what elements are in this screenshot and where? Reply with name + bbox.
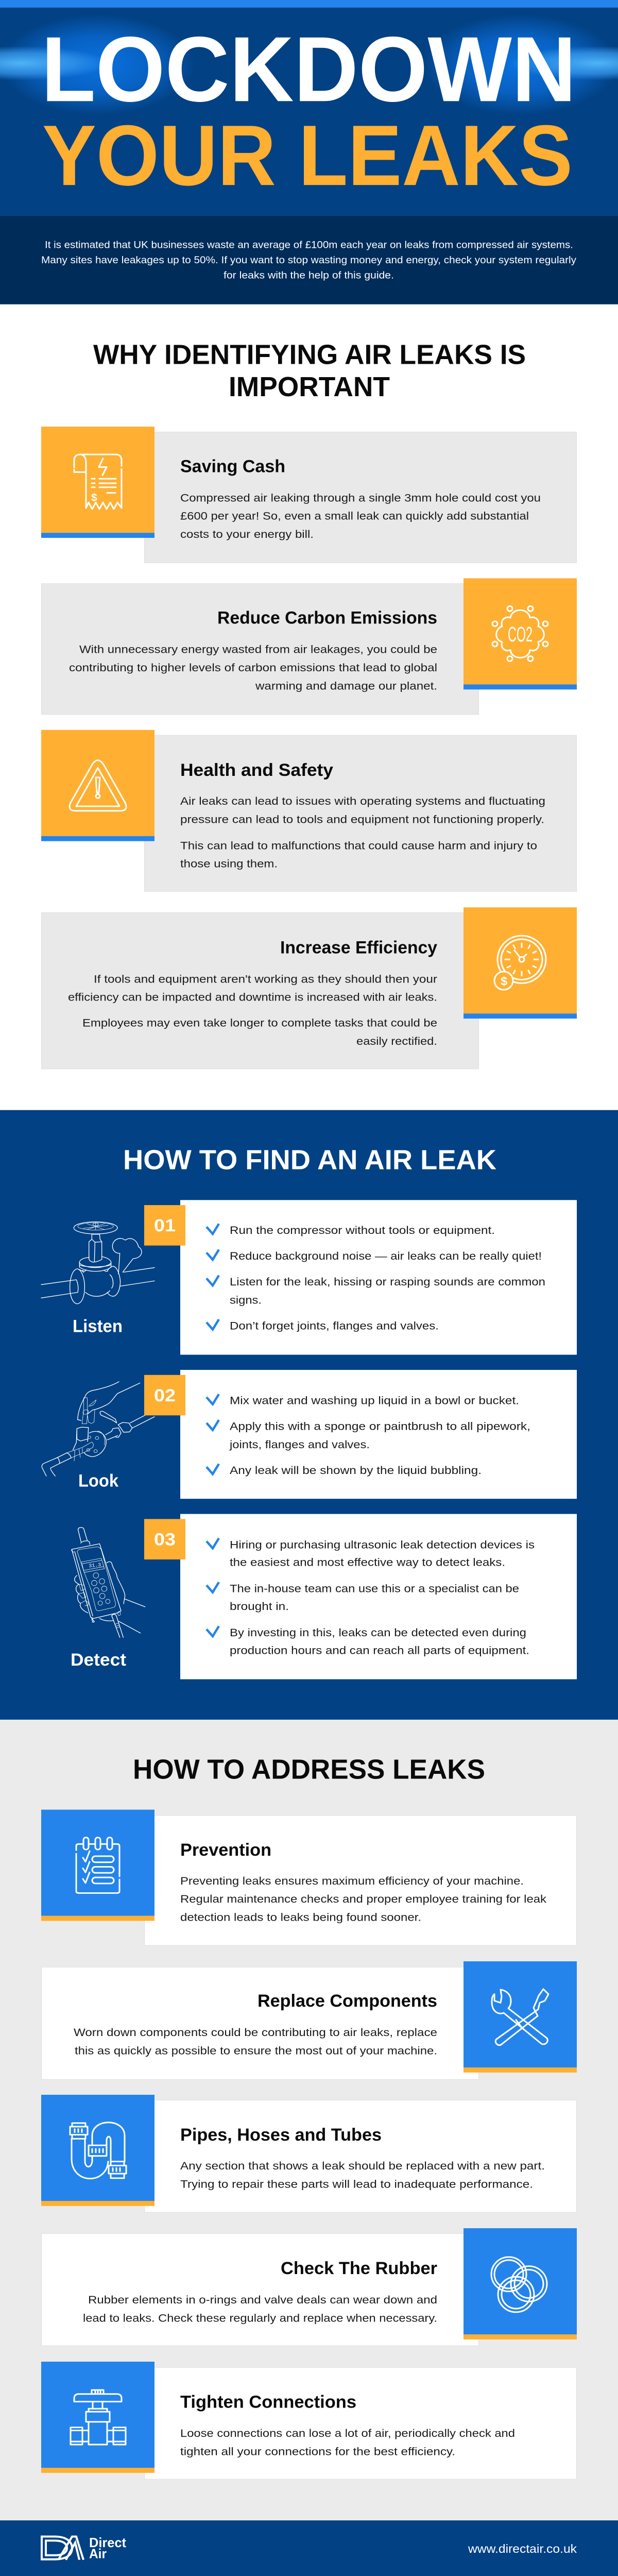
checklist: the easiest and most effective way to detect leaks. xyxy=(230,1556,505,1569)
label: Look xyxy=(78,1471,119,1491)
body text xyxy=(180,1875,546,1923)
step 02: look xyxy=(42,1370,577,1499)
checklist xyxy=(207,1394,530,1477)
checklist: Any leak will be shown by the liquid bubbling. xyxy=(230,1464,482,1477)
section: how to find an air leak xyxy=(0,1110,618,1720)
body text: Trying to repair these parts will lead to inadequate performance. xyxy=(180,2178,533,2190)
intro text block: It is estimated that UK businesses waste an average of £100m each year on leaks from compressed air systems. xyxy=(45,240,573,251)
white card xyxy=(180,1370,577,1499)
number badge 01: 01 xyxy=(154,1216,176,1235)
checklist: joints, flanges and valves. xyxy=(229,1438,370,1451)
body text xyxy=(83,2294,437,2324)
heading: why identifying air leaks is important: IMPORTANT xyxy=(229,371,390,402)
icon: crossed wrench and screwdriver xyxy=(464,1961,577,2073)
icon: warning triangle xyxy=(41,730,154,841)
body text: £600 per year! So, even a small leak can quickly add substantial xyxy=(180,510,529,522)
title: Replace Components xyxy=(258,1991,437,2011)
section: how to address leaks xyxy=(0,1720,618,2520)
label: Detect xyxy=(71,1650,126,1670)
checklist: brought in. xyxy=(230,1600,289,1613)
heading: HOW TO ADDRESS LEAKS xyxy=(133,1754,485,1785)
checklist: signs. xyxy=(230,1294,262,1306)
checklist: The in-house team can use this or a specialist can be xyxy=(230,1583,519,1595)
number badge 02 xyxy=(144,1375,185,1415)
body text: efficiency can be impacted and downtime is increased with air leaks. xyxy=(68,991,437,1004)
panel: health and safety xyxy=(41,730,577,891)
intro text block: for leaks with the help of this guide. xyxy=(224,270,394,281)
body text: warming and damage our planet. xyxy=(255,680,437,692)
icon: valve xyxy=(41,2362,154,2473)
body text: Loose connections can lose a lot of air, periodically check and xyxy=(180,2427,515,2439)
checklist: Don’t forget joints, flanges and valves. xyxy=(230,1320,439,1332)
checklist xyxy=(207,1538,535,1656)
number badge 03 xyxy=(144,1519,185,1560)
body text xyxy=(180,2160,545,2190)
icon: clock and coin: $ xyxy=(501,974,507,988)
body text: With unnecessary energy wasted from air leakages, you could be xyxy=(79,643,437,656)
illustration: leaking valve xyxy=(41,1222,154,1304)
body text: Rubber elements in o-rings and valve deals can wear down and xyxy=(88,2294,437,2306)
logo: direct air: Air xyxy=(89,2547,107,2562)
logo: direct air: Direct xyxy=(89,2536,126,2550)
title line 1: LOCKDOWN xyxy=(41,18,576,121)
body text: Regular maintenance checks and proper employee training for leak xyxy=(180,1893,546,1905)
body text xyxy=(68,973,437,1047)
heading: why identifying air leaks is important: WHY IDENTIFYING AIR LEAKS IS xyxy=(93,339,526,370)
title: Check The Rubber xyxy=(281,2259,437,2278)
checklist: Hiring or purchasing ultrasonic leak detection devices is xyxy=(230,1538,535,1551)
body text: tighten all your connections for the best efficiency. xyxy=(180,2446,455,2458)
white card xyxy=(180,1514,577,1679)
body text: this as quickly as possible to ensure the most out of your machine. xyxy=(75,2045,437,2057)
number badge 02: 02 xyxy=(154,1386,176,1405)
body text: This can lead to malfunctions that could cause harm and injury to xyxy=(180,840,537,852)
intro text block: Many sites have leakages up to 50%. If you want to stop wasting money and energy, check your system regularly xyxy=(41,255,576,266)
icon: electricity bill receipt xyxy=(41,427,154,538)
body text xyxy=(69,643,437,692)
title: Health and Safety xyxy=(180,760,334,780)
label: Listen xyxy=(73,1317,123,1336)
icon: checklist notepad xyxy=(41,1810,154,1921)
body text: If tools and equipment aren't working as they should then your xyxy=(94,973,437,985)
body text xyxy=(180,795,545,870)
checklist: Listen for the leak, hissing or rasping sounds are common xyxy=(230,1276,545,1288)
checklist: Mix water and washing up liquid in a bowl or bucket. xyxy=(230,1395,519,1407)
header banner xyxy=(0,0,618,216)
body text: pressure can lead to tools and equipment not functioning properly. xyxy=(180,814,544,825)
body text: lead to leaks. Check these regularly and replace when necessary. xyxy=(83,2312,437,2324)
title: Increase Efficiency xyxy=(280,938,438,957)
illustration: handheld ultrasonic detector xyxy=(72,1528,145,1637)
number badge 01 xyxy=(144,1205,185,1246)
checklist xyxy=(207,1224,545,1332)
number badge 03: 03 xyxy=(154,1530,176,1549)
illustration: hand applying liquid to pipe xyxy=(42,1382,154,1476)
website url: www.directair.co.uk xyxy=(468,2542,577,2556)
icon: clock and coin xyxy=(464,907,577,1019)
title: Prevention xyxy=(180,1840,271,1860)
checklist: Reduce background noise — air leaks can be really quiet! xyxy=(230,1250,542,1262)
logo: direct air xyxy=(42,2536,126,2562)
title line 2: YOUR LEAKS xyxy=(42,108,573,204)
title: Saving Cash xyxy=(180,457,285,476)
panel: pipes, hoses and tubes xyxy=(41,2095,577,2212)
body text: Compressed air leaking through a single 3mm hole could cost you xyxy=(180,492,541,504)
footer xyxy=(0,2520,618,2576)
icon: electricity bill receipt: $ xyxy=(91,492,97,503)
icon: rubber o-rings xyxy=(464,2228,577,2340)
checklist: By investing in this, leaks can be detected even during xyxy=(230,1626,526,1639)
heading: why identifying air leaks is important xyxy=(93,339,526,402)
body text: Preventing leaks ensures maximum efficiency of your machine. xyxy=(180,1875,524,1887)
panel: check the rubber xyxy=(41,2228,577,2346)
panel: prevention xyxy=(41,1810,577,1945)
body text xyxy=(180,2427,515,2458)
checklist: Apply this with a sponge or paintbrush to all pipework, xyxy=(230,1420,530,1433)
body text: contributing to higher levels of carbon emissions that lead to global xyxy=(69,662,437,674)
body text: Worn down components could be contributing to air leaks, replace xyxy=(74,2026,437,2039)
heading: HOW TO FIND AN AIR LEAK xyxy=(123,1144,496,1175)
body text: Air leaks can lead to issues with operating systems and fluctuating xyxy=(180,795,545,807)
illustration: handheld ultrasonic detector: 31.3 xyxy=(89,1562,101,1569)
checklist: Run the compressor without tools or equipment. xyxy=(230,1224,495,1236)
panel: replace components xyxy=(41,1961,577,2079)
body text: Employees may even take longer to complete tasks that could be xyxy=(82,1017,437,1029)
title: Tighten Connections xyxy=(180,2393,356,2412)
white card xyxy=(180,1200,577,1355)
title: Reduce Carbon Emissions xyxy=(217,608,437,628)
icon: hose xyxy=(41,2095,154,2206)
body text: detection leads to leaks being found sooner. xyxy=(180,1911,421,1923)
step 01: listen xyxy=(41,1200,577,1355)
body text: Any section that shows a leak should be replaced with a new part. xyxy=(180,2160,545,2172)
title: Pipes, Hoses and Tubes xyxy=(180,2126,382,2145)
icon: co2 cloud xyxy=(464,578,577,689)
panel: increase efficiency xyxy=(41,907,577,1069)
body text: those using them. xyxy=(180,858,278,870)
panel: tighten connections xyxy=(41,2362,577,2479)
intro text block xyxy=(0,216,618,304)
icon: co2 cloud: CO2 xyxy=(508,622,533,646)
step 03: detect xyxy=(71,1514,577,1679)
body text xyxy=(180,492,541,540)
body text: easily rectified. xyxy=(356,1035,437,1047)
panel: reduce carbon emissions xyxy=(41,578,577,715)
checklist: production hours and can reach all parts of equipment. xyxy=(230,1645,529,1656)
panel: saving cash xyxy=(41,427,577,563)
body text xyxy=(74,2026,437,2057)
body text: costs to your energy bill. xyxy=(180,528,314,540)
